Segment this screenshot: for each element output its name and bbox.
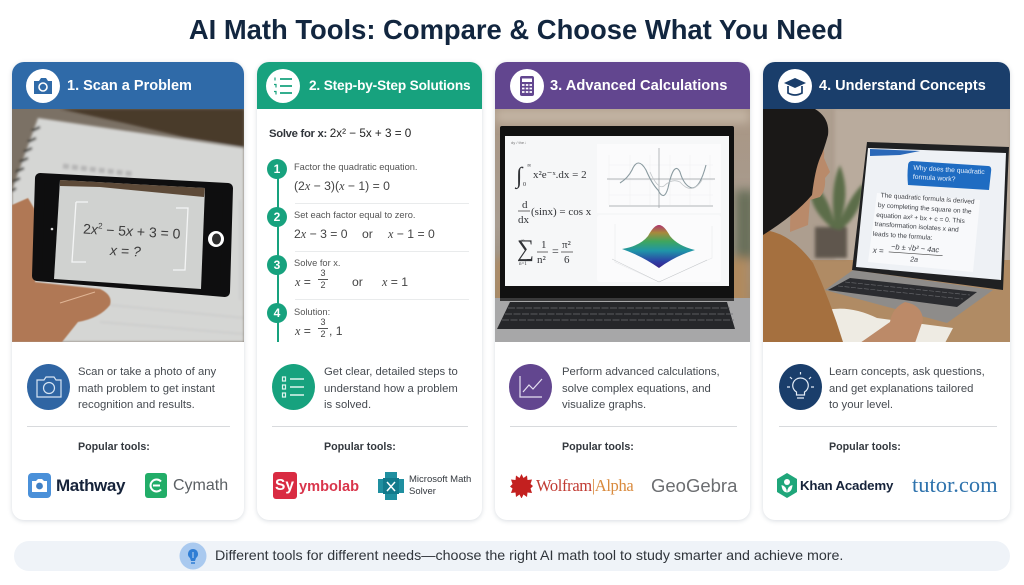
formulas: = [552, 244, 559, 258]
3D surface plot [615, 224, 712, 282]
description: visualize graphs. [562, 399, 646, 411]
logo: Wolfram Alpha [510, 474, 634, 498]
header: understand concepts [763, 62, 1010, 109]
worked solution: Set each factor equal to zero. [294, 210, 415, 220]
worked solution: 2 [320, 329, 326, 339]
logo: Mathway: Mathway [56, 476, 125, 495]
description: Learn concepts, ask questions, [829, 366, 985, 378]
photo: laptop with formulas and graphs: dy / the↓ [511, 140, 526, 145]
description: Scan or take a photo of any [78, 366, 216, 378]
2D graph [607, 148, 715, 208]
formulas: (sinx) = cos x [531, 206, 592, 218]
formulas: d [522, 199, 528, 211]
step 4 [267, 303, 287, 323]
logo: Symbolab: Sy [275, 477, 294, 494]
label: popular tools: Popular tools: [324, 441, 396, 453]
heading: 4. Understand Concepts [819, 78, 986, 94]
formulas: 0 [523, 182, 526, 188]
formulas: ∫ [514, 163, 524, 190]
title: AI Math Tools: Compare & Choose What You Need [189, 14, 843, 45]
icon: lightbulb [180, 542, 206, 570]
worked solution: x = [295, 324, 311, 338]
step 2 [267, 207, 287, 227]
worked solution: 3 [320, 268, 326, 278]
photo: student with AI chat: leads to the formula: [873, 231, 933, 242]
formulas: ∞ [527, 163, 531, 169]
worked solution: or [362, 227, 373, 241]
logo: Cymath [145, 473, 228, 498]
photo: phone scanning equation [12, 109, 244, 342]
photo: student with AI chat: −b ± √b² − 4ac [891, 242, 940, 254]
description: Get clear, detailed steps to [324, 366, 458, 378]
student [790, 130, 830, 232]
photo: phone scanning equation: 2 [98, 221, 103, 231]
description: math problem to get instant [78, 382, 215, 394]
icon: chart circle [509, 364, 552, 410]
heading: 2. Step-by-Step Solutions [309, 78, 470, 93]
heading: 1. Scan a Problem [67, 78, 192, 94]
equation: Solve for x: 2x² − 5x + 3 = 0 [269, 127, 411, 140]
formulas: n² [537, 254, 546, 266]
worked solution: 2x − 3 = 0 [294, 227, 348, 241]
logo: tutor.com: tutor.com [912, 472, 998, 497]
icon: camera circle [27, 364, 70, 410]
formulas: 6 [564, 254, 570, 266]
photo: student with AI chat: formula work? [913, 174, 956, 183]
description: and get explanations tailored [829, 382, 973, 394]
photo: student with AI chat: Why does the quadratic [913, 165, 985, 176]
photo: student with AI chat: x = [871, 246, 884, 256]
description [78, 366, 216, 411]
panel: understand concepts [763, 62, 1010, 520]
formulas: π² [562, 239, 572, 251]
photo: student with AI chat: equation ax² + bx + c = 0. This [876, 212, 966, 225]
worked solution: 3 [320, 317, 326, 327]
header: scan a problem [12, 62, 244, 109]
header: advanced calculations [495, 62, 750, 109]
label: popular tools: Popular tools: [829, 441, 901, 453]
formulas [514, 163, 592, 267]
panel: advanced calculations [495, 62, 750, 520]
description: Perform advanced calculations, [562, 366, 720, 378]
worked solution: Solution: [294, 307, 330, 317]
photo: student with AI chat: by completing the square on the [878, 202, 972, 216]
label: popular tools: Popular tools: [562, 441, 634, 453]
hand [12, 198, 111, 342]
worked solution: x = 1 [382, 275, 408, 289]
step 1 [267, 159, 287, 179]
logo: Khan Academy [777, 473, 894, 498]
step 3 [267, 255, 287, 275]
header: step-by-step [257, 62, 482, 109]
icon: graduation cap [778, 69, 812, 103]
takeaway bar [14, 541, 1010, 571]
description: to your level. [829, 399, 893, 411]
logo: Symbolab: ymbolab [299, 479, 359, 495]
photo: phone scanning equation: 2x [83, 221, 98, 237]
worked solution: (2x − 3)(x − 1) = 0 [294, 179, 390, 193]
formulas: dx [518, 214, 530, 226]
icon: list circle [272, 364, 315, 410]
step 1: 1 [274, 162, 280, 176]
worked solution: , 1 [329, 324, 343, 338]
description: recognition and results. [78, 399, 195, 411]
description [829, 366, 985, 411]
description [562, 366, 720, 411]
icon: numbered list [266, 69, 300, 103]
logo: Mathway [28, 473, 126, 498]
photo: laptop with formulas and graphs [495, 109, 750, 342]
photo: student with AI chat [763, 109, 1010, 342]
formulas: ∑ [517, 236, 534, 262]
worked solution: or [352, 275, 363, 289]
step 3: 3 [274, 258, 280, 272]
logo: GeoGebra: GeoGebra [651, 475, 737, 496]
formulas: x²e⁻ˣ.dx = 2 [533, 169, 587, 181]
worked solution: x = [295, 275, 311, 289]
worked solution: x − 1 = 0 [388, 227, 435, 241]
photo: phone scanning equation: x = ? [109, 242, 141, 260]
photo: student with AI chat: transformation isolates x and [874, 221, 959, 234]
step 2: 2 [274, 210, 280, 224]
logo: Wolfram Alpha: Wolfram|Alpha [536, 476, 633, 495]
logo: Microsoft Math Solver: Microsoft Math [409, 474, 471, 485]
photo: student with AI chat: The quadratic formula is derived [880, 192, 975, 206]
description: is solved. [324, 399, 371, 411]
logo: Khan Academy: Khan Academy [800, 478, 893, 493]
logo: Microsoft Math Solver [378, 472, 471, 500]
photo: phone scanning equation: x + 3 = 0 [126, 223, 181, 242]
worked solution: Factor the quadratic equation. [294, 162, 418, 172]
worked solution [267, 127, 469, 342]
formulas: n=1 [519, 262, 527, 267]
takeaway text: Different tools for different needs—choose the right AI math tool to study smarter and achieve more. [215, 548, 843, 564]
icon: calculator [510, 69, 544, 103]
description [324, 366, 458, 411]
laptop base [825, 270, 993, 323]
logo: Microsoft Math Solver: Solver [409, 486, 436, 497]
worked solution: 2 [320, 280, 326, 290]
photo: phone scanning equation: − 5 [102, 222, 127, 239]
description: solve complex equations, and [562, 382, 711, 394]
photo: student with AI chat: 2a [909, 256, 918, 264]
step 4: 4 [274, 306, 280, 320]
logo: Cymath: Cymath [173, 477, 228, 494]
label: popular tools: Popular tools: [78, 441, 150, 453]
formulas: 1 [541, 239, 546, 251]
heading: 3. Advanced Calculations [550, 78, 727, 94]
formulas: ∞ [521, 239, 525, 244]
icon: camera [26, 69, 60, 103]
panel: scan a problem [12, 62, 244, 520]
worked solution: Solve for x. [294, 258, 341, 268]
notebook [827, 309, 953, 343]
icon: lightbulb circle [779, 364, 822, 410]
logo: Symbolab [273, 472, 359, 499]
description: understand how a problem [324, 382, 458, 394]
panel: step-by-step solutions [257, 62, 482, 520]
